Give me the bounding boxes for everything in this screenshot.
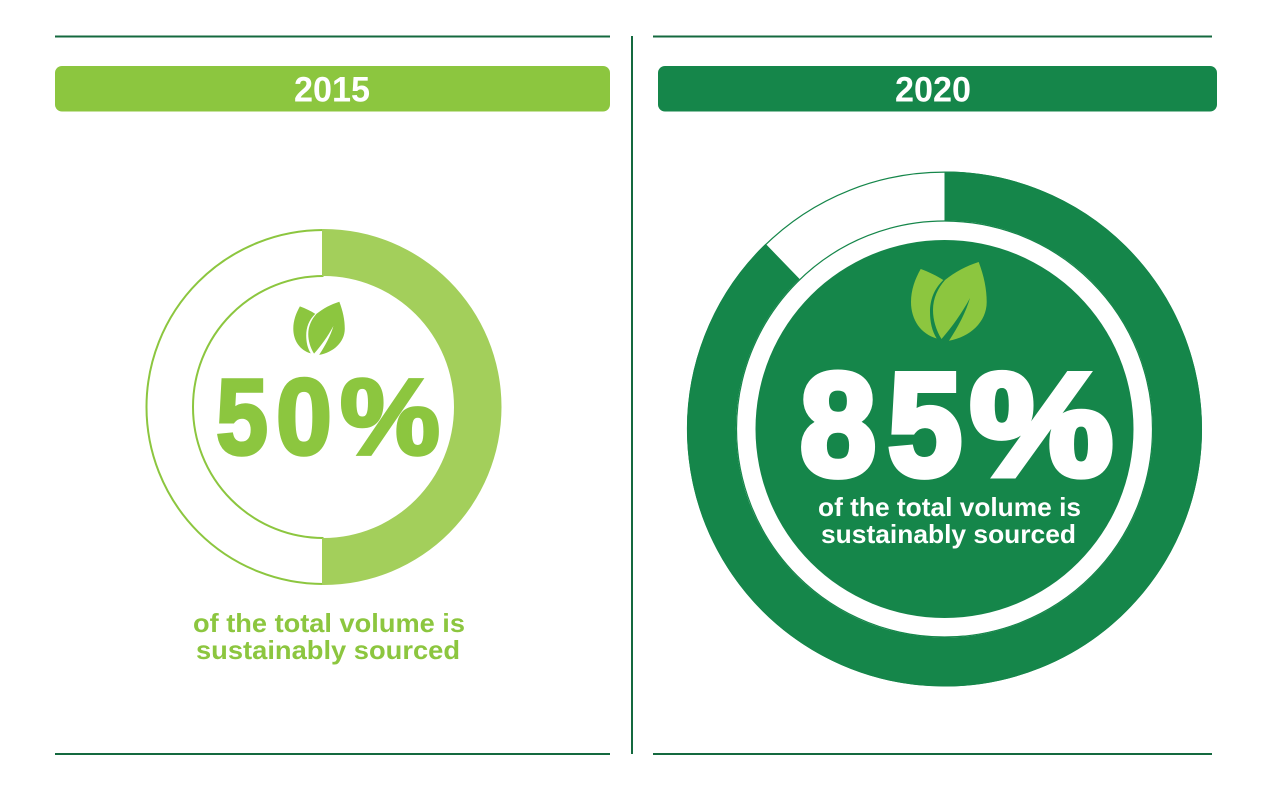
caption: 2015 <box>193 608 465 665</box>
stat: 85% <box>800 343 1113 506</box>
stat: 50%: 0 <box>276 356 332 477</box>
caption: 2020 <box>818 492 1081 549</box>
stat: 50% <box>216 356 440 477</box>
stat: 50%: 5 <box>216 356 268 477</box>
stat: 85%: 8 <box>800 343 876 506</box>
panel: 2015 <box>55 66 610 665</box>
caption: 2015: of the total volume is <box>193 608 465 638</box>
icon: leaves 2020 <box>911 262 987 341</box>
header bar: 2020 <box>658 66 1217 112</box>
caption: 2015: sustainably sourced <box>196 635 460 665</box>
donut chart: 85 percent <box>688 172 1201 686</box>
caption: 2020: of the total volume is <box>818 492 1081 522</box>
header bar: 2015: 2015 <box>294 70 370 110</box>
stat: 85%: 5 <box>888 343 962 506</box>
stat: 85%: % <box>970 343 1113 506</box>
icon: leaves 2015 <box>293 302 345 355</box>
header bar: 2015 <box>55 66 610 112</box>
header bar: 2020: 2020 <box>895 70 971 110</box>
caption: 2020: sustainably sourced <box>821 519 1076 549</box>
donut chart: 50 percent <box>146 229 501 585</box>
stat: 50%: % <box>340 356 440 477</box>
panel: 2020 <box>658 66 1217 686</box>
